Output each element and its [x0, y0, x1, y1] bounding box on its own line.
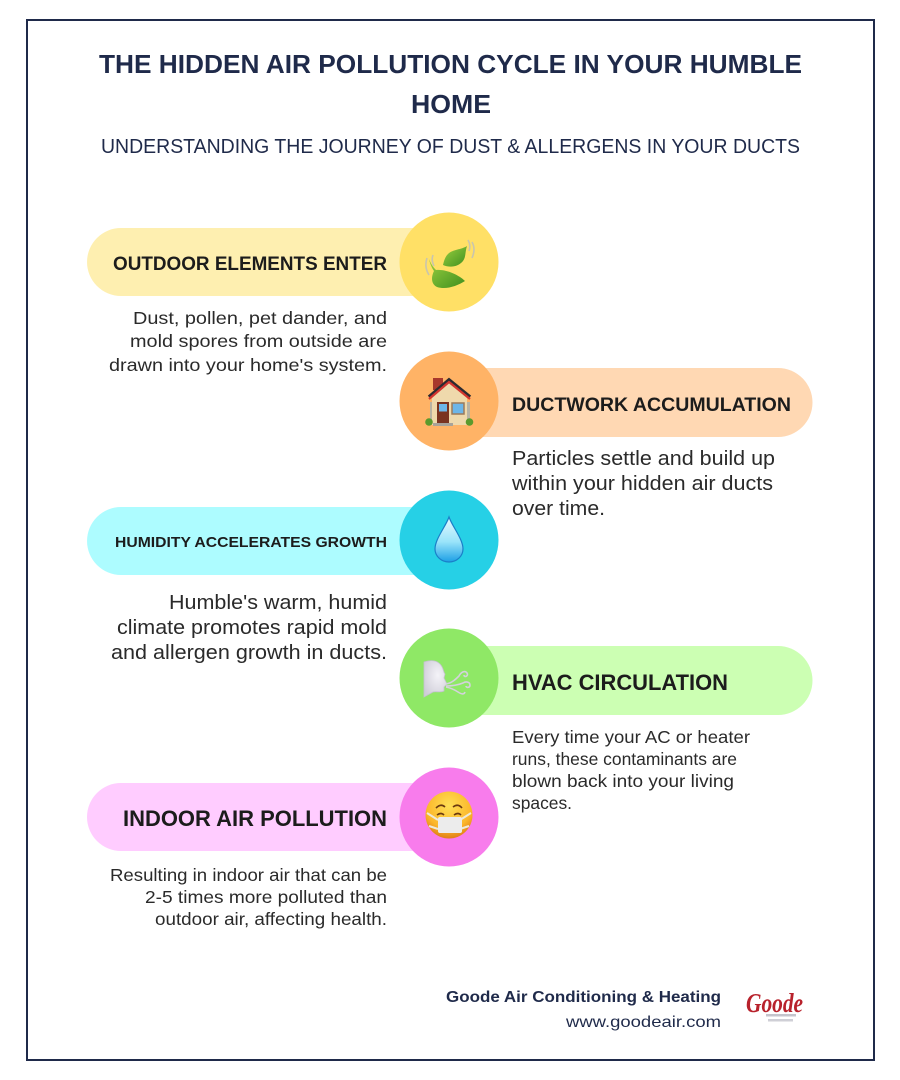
step 2 description: Particles settle and build up	[512, 448, 775, 470]
step 4 description: runs, these contaminants are	[512, 749, 737, 769]
step 4 description: spaces.	[512, 793, 572, 813]
step 5: indoor air pollution	[87, 768, 498, 929]
step 3 circle	[400, 490, 498, 590]
step 2 description	[511, 448, 775, 520]
step 2 description: within your hidden air ducts	[511, 473, 773, 495]
step 4 circle	[400, 628, 498, 728]
subtitle: UNDERSTANDING THE JOURNEY OF DUST & ALLERGENS IN YOUR DUCTS	[101, 136, 800, 158]
step 1 description: drawn into your home's system.	[109, 355, 387, 375]
step 2 heading: DUCTWORK ACCUMULATION	[512, 394, 791, 416]
step 5 description: outdoor air, affecting health.	[155, 909, 387, 929]
step 1 description	[109, 308, 387, 375]
icon: leaves in the wind	[426, 240, 474, 288]
step 4 description: Every time your AC or heater	[512, 727, 750, 747]
step 5 pill	[87, 783, 430, 851]
step 5 heading: INDOOR AIR POLLUTION	[123, 806, 387, 831]
step 2: ductwork accumulation	[400, 352, 813, 520]
step 1 description: mold spores from outside are	[130, 331, 387, 351]
step 1 circle	[400, 212, 498, 312]
step 4 pill	[470, 646, 813, 715]
step 4 description	[512, 727, 750, 813]
step 2 circle	[400, 352, 498, 450]
icon: water drop	[435, 517, 463, 562]
step 3 description	[111, 592, 387, 664]
icon: face with medical mask	[426, 792, 472, 838]
step 4: hvac circulation	[400, 628, 813, 813]
step 1 pill	[87, 228, 430, 296]
step 3 description: Humble's warm, humid	[169, 592, 387, 614]
step 3 description: climate promotes rapid mold	[117, 617, 387, 639]
step 2 pill	[470, 368, 813, 437]
icon: wind face	[424, 661, 470, 697]
footer: website: www.goodeair.com	[565, 1014, 721, 1031]
title: HOME	[411, 89, 491, 119]
title	[99, 49, 802, 119]
step 3: humidity accelerates growth	[87, 490, 498, 664]
step 4 heading: HVAC CIRCULATION	[512, 670, 728, 695]
step 3 pill	[87, 507, 430, 575]
step 3 description: and allergen growth in ducts.	[111, 642, 387, 664]
step 2 description: over time.	[512, 498, 605, 520]
step 4 description: blown back into your living	[512, 771, 734, 791]
icon: house	[425, 378, 473, 426]
step 5 description: 2-5 times more polluted than	[145, 887, 387, 907]
step 1 heading: OUTDOOR ELEMENTS ENTER	[113, 254, 387, 275]
step 5 description: Resulting in indoor air that can be	[110, 865, 387, 885]
step 5 description	[110, 865, 387, 929]
logo: Goode: Goode	[746, 988, 803, 1018]
step 1: outdoor elements enter	[87, 212, 499, 375]
step 3 heading: HUMIDITY ACCELERATES GROWTH	[115, 534, 387, 551]
footer: company name: Goode Air Conditioning & Heating	[446, 989, 721, 1006]
step 5 circle	[400, 768, 498, 866]
step 1 description: Dust, pollen, pet dander, and	[133, 308, 387, 328]
title: THE HIDDEN AIR POLLUTION CYCLE IN YOUR HUMBLE	[99, 49, 802, 79]
